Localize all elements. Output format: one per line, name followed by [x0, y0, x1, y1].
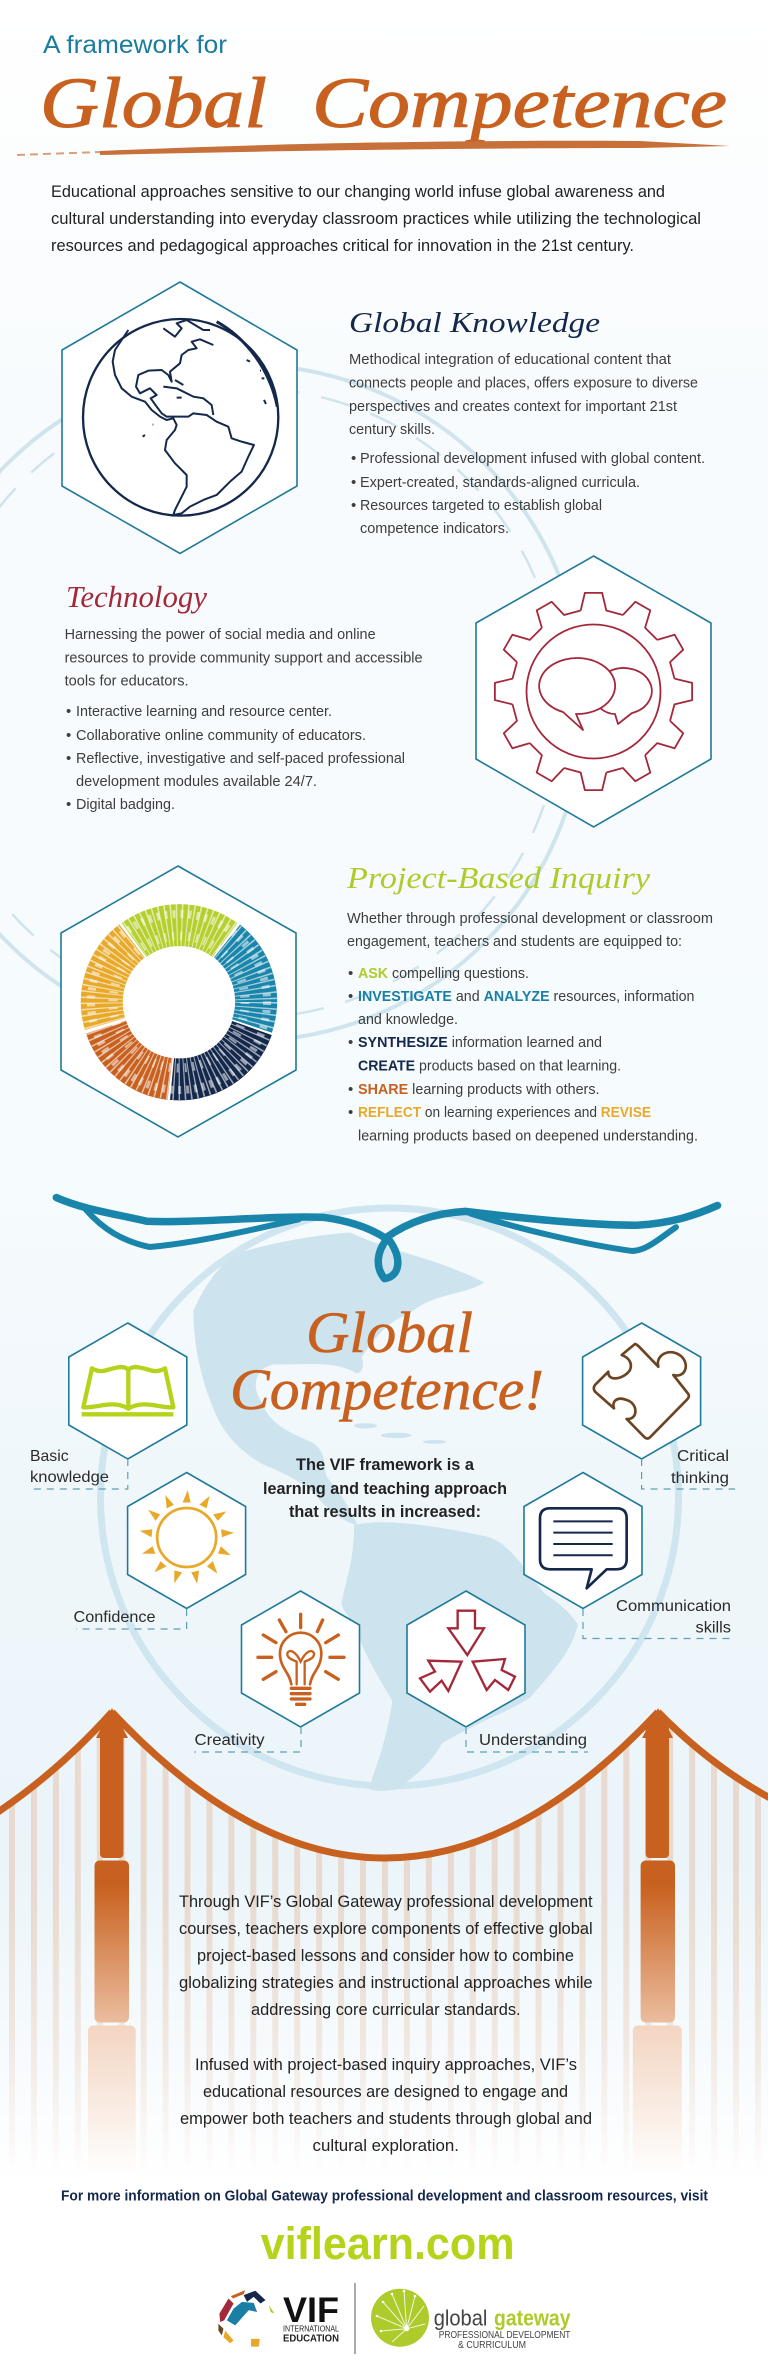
bullet list: • — [66, 703, 71, 720]
outcome: basic knowledge — [30, 1323, 187, 1489]
ribbon — [56, 1198, 718, 1279]
big background globe — [100, 1208, 678, 1791]
icon: scribbled cycle ring — [91, 914, 267, 1090]
intro paragraph: cultural understanding into everyday classroom practices while utilizing the technological — [51, 209, 701, 228]
outcome: confidence — [74, 1472, 246, 1629]
main title: Global — [40, 63, 267, 143]
bullet list: Collaborative online community of educators. — [76, 727, 366, 744]
framework statement — [263, 1455, 507, 1521]
description — [349, 351, 698, 438]
bullet list: • — [348, 1034, 353, 1051]
description: connects people and places, offers exposure to diverse — [349, 374, 698, 392]
outcome: creativity — [194, 1591, 360, 1752]
hexagon — [61, 866, 296, 1137]
call to action: For more information on Global Gateway professional development and classroom resources, visit — [61, 2188, 708, 2204]
hexagon — [476, 556, 711, 827]
closing paragraph 1: addressing core curricular standards. — [251, 2000, 521, 2019]
closing paragraph 1: project-based lessons and consider how to combine — [197, 1946, 574, 1965]
bullet list: • — [348, 965, 353, 982]
heading: global competence: Competence! — [230, 1357, 544, 1422]
framework statement: The VIF framework is a — [296, 1455, 475, 1474]
bullet list: • — [348, 1104, 353, 1121]
label: Understanding — [479, 1732, 587, 1749]
heading: global competence: Global — [306, 1300, 473, 1365]
wordmark: VIF — [283, 2291, 339, 2330]
bullet list: REFLECT on learning experiences and REVISE — [358, 1104, 651, 1121]
description: Whether through professional development or classroom — [347, 910, 713, 927]
icon: sun — [139, 1490, 234, 1585]
main cables — [0, 1712, 768, 1858]
description: century skills. — [349, 421, 435, 438]
website url: viflearn.com — [261, 2218, 515, 2269]
closing paragraph 2: empower both teachers and students through global and — [180, 2109, 592, 2128]
bullet list: Interactive learning and resource center. — [76, 703, 332, 720]
icon: gear with speech bubbles — [493, 591, 694, 792]
bullet list — [351, 450, 705, 537]
icon: book — [82, 1367, 173, 1414]
label: Communication — [616, 1598, 731, 1615]
bullet list: • — [66, 750, 71, 767]
bullet list: • — [348, 988, 353, 1005]
bullet list: • — [66, 727, 71, 744]
heading: global knowledge: Global Knowledge — [349, 308, 600, 339]
closing paragraph 2 — [180, 2055, 592, 2155]
suspender cables — [9, 1728, 761, 2136]
bullet list: development modules available 24/7. — [76, 773, 317, 790]
closing paragraph 2: cultural exploration. — [312, 2136, 459, 2155]
label — [616, 1598, 731, 1636]
title kicker: A framework for — [43, 31, 227, 59]
label: thinking — [671, 1470, 729, 1487]
icon: converging arrows — [420, 1611, 515, 1692]
bullet list: SHARE learning products with others. — [358, 1081, 600, 1098]
outcome: critical thinking — [583, 1323, 735, 1489]
label — [30, 1448, 109, 1486]
panel: global knowledge — [62, 282, 705, 554]
bullet list — [66, 703, 405, 813]
main title — [40, 63, 727, 143]
heading: global competence — [230, 1300, 544, 1422]
framework statement: learning and teaching approach — [263, 1479, 507, 1498]
panel: project-based inquiry — [61, 860, 713, 1144]
description — [65, 626, 423, 690]
bullet list: • — [351, 450, 356, 467]
description: engagement, teachers and students are equipped to: — [347, 933, 682, 950]
icon: puzzle piece — [594, 1344, 689, 1439]
wordmark: INTERNATIONAL — [283, 2324, 339, 2334]
bullet list: and knowledge. — [358, 1011, 458, 1028]
bullet list: competence indicators. — [360, 520, 509, 537]
main title: Competence — [312, 63, 727, 143]
icon: speech bubble — [540, 1508, 627, 1588]
hexagon — [62, 282, 297, 554]
icon: globe — [83, 319, 278, 516]
closing paragraph 1 — [179, 1892, 593, 2019]
closing paragraph 1: courses, teachers explore components of effective global — [179, 1919, 593, 1938]
bullet list: • — [66, 796, 71, 813]
wordmark: & CURRICULUM — [458, 2339, 526, 2351]
label — [671, 1448, 729, 1487]
bullet list: Digital badging. — [76, 796, 175, 813]
bullet list: Expert-created, standards-aligned curricula. — [360, 474, 640, 491]
closing paragraph 2: educational resources are designed to engage and — [203, 2082, 568, 2101]
wordmark: PROFESSIONAL DEVELOPMENT — [439, 2329, 571, 2341]
brush underline — [17, 141, 730, 155]
closing paragraph 1: Through VIF’s Global Gateway professional development — [179, 1892, 593, 1911]
label: Basic — [30, 1448, 69, 1465]
bullet list: CREATE products based on that learning. — [358, 1058, 621, 1074]
description: perspectives and creates context for important 21st — [349, 398, 678, 415]
bullet list: learning products based on deepened understanding. — [358, 1128, 698, 1144]
label: knowledge — [30, 1469, 109, 1486]
logo: VIF International Education — [218, 2290, 339, 2347]
intro paragraph — [51, 182, 701, 255]
bullet list: ASK compelling questions. — [358, 965, 529, 982]
intro paragraph: Educational approaches sensitive to our changing world infuse global awareness and — [51, 182, 665, 201]
label: skills — [696, 1620, 731, 1636]
bullet list: • — [348, 1081, 353, 1098]
heading: project-based inquiry: Project-Based Inquiry — [346, 860, 650, 895]
closing paragraph 1: globalizing strategies and instructional approaches while — [179, 1973, 593, 1992]
outcome: communication skills — [524, 1472, 731, 1638]
description — [347, 910, 713, 950]
closing paragraph 2: Infused with project-based inquiry approaches, VIF’s — [195, 2055, 577, 2074]
background orbit arcs — [0, 365, 584, 1041]
bridge — [0, 1708, 768, 2176]
logo mark — [371, 2289, 429, 2347]
bullet list: • — [351, 497, 356, 514]
bullet list — [348, 965, 698, 1144]
wordmark: global — [434, 2305, 487, 2330]
logo mark — [218, 2290, 275, 2347]
outcome: understanding — [407, 1591, 588, 1752]
description: tools for educators. — [65, 672, 189, 690]
description: resources to provide community support and accessible — [65, 650, 423, 666]
wordmark: EDUCATION — [283, 2332, 339, 2344]
panel: technology — [65, 556, 711, 827]
bullet list: Resources targeted to establish global — [360, 497, 602, 514]
wordmark — [434, 2305, 571, 2351]
right tower — [633, 1708, 682, 2176]
intro paragraph: resources and pedagogical approaches critical for innovation in the 21st century. — [51, 236, 634, 255]
label: Critical — [677, 1448, 729, 1465]
wordmark: gateway — [494, 2305, 571, 2330]
heading: technology: Technology — [66, 579, 207, 614]
label: Confidence — [74, 1609, 156, 1626]
bullet list: Professional development infused with global content. — [360, 450, 705, 467]
icon: lightbulb — [258, 1614, 344, 1704]
bullet list: Reflective, investigative and self-paced professional — [76, 750, 405, 767]
bullet list: SYNTHESIZE information learned and — [358, 1034, 602, 1051]
left tower — [88, 1708, 136, 2176]
description: Harnessing the power of social media and online — [65, 626, 376, 643]
logo: global gateway — [371, 2289, 571, 2351]
bullet list: • — [351, 474, 356, 491]
bullet list: INVESTIGATE and ANALYZE resources, information — [358, 988, 694, 1005]
label: Creativity — [194, 1732, 264, 1749]
header — [17, 31, 730, 155]
description: Methodical integration of educational content that — [349, 351, 672, 368]
framework statement: that results in increased: — [289, 1502, 481, 1521]
